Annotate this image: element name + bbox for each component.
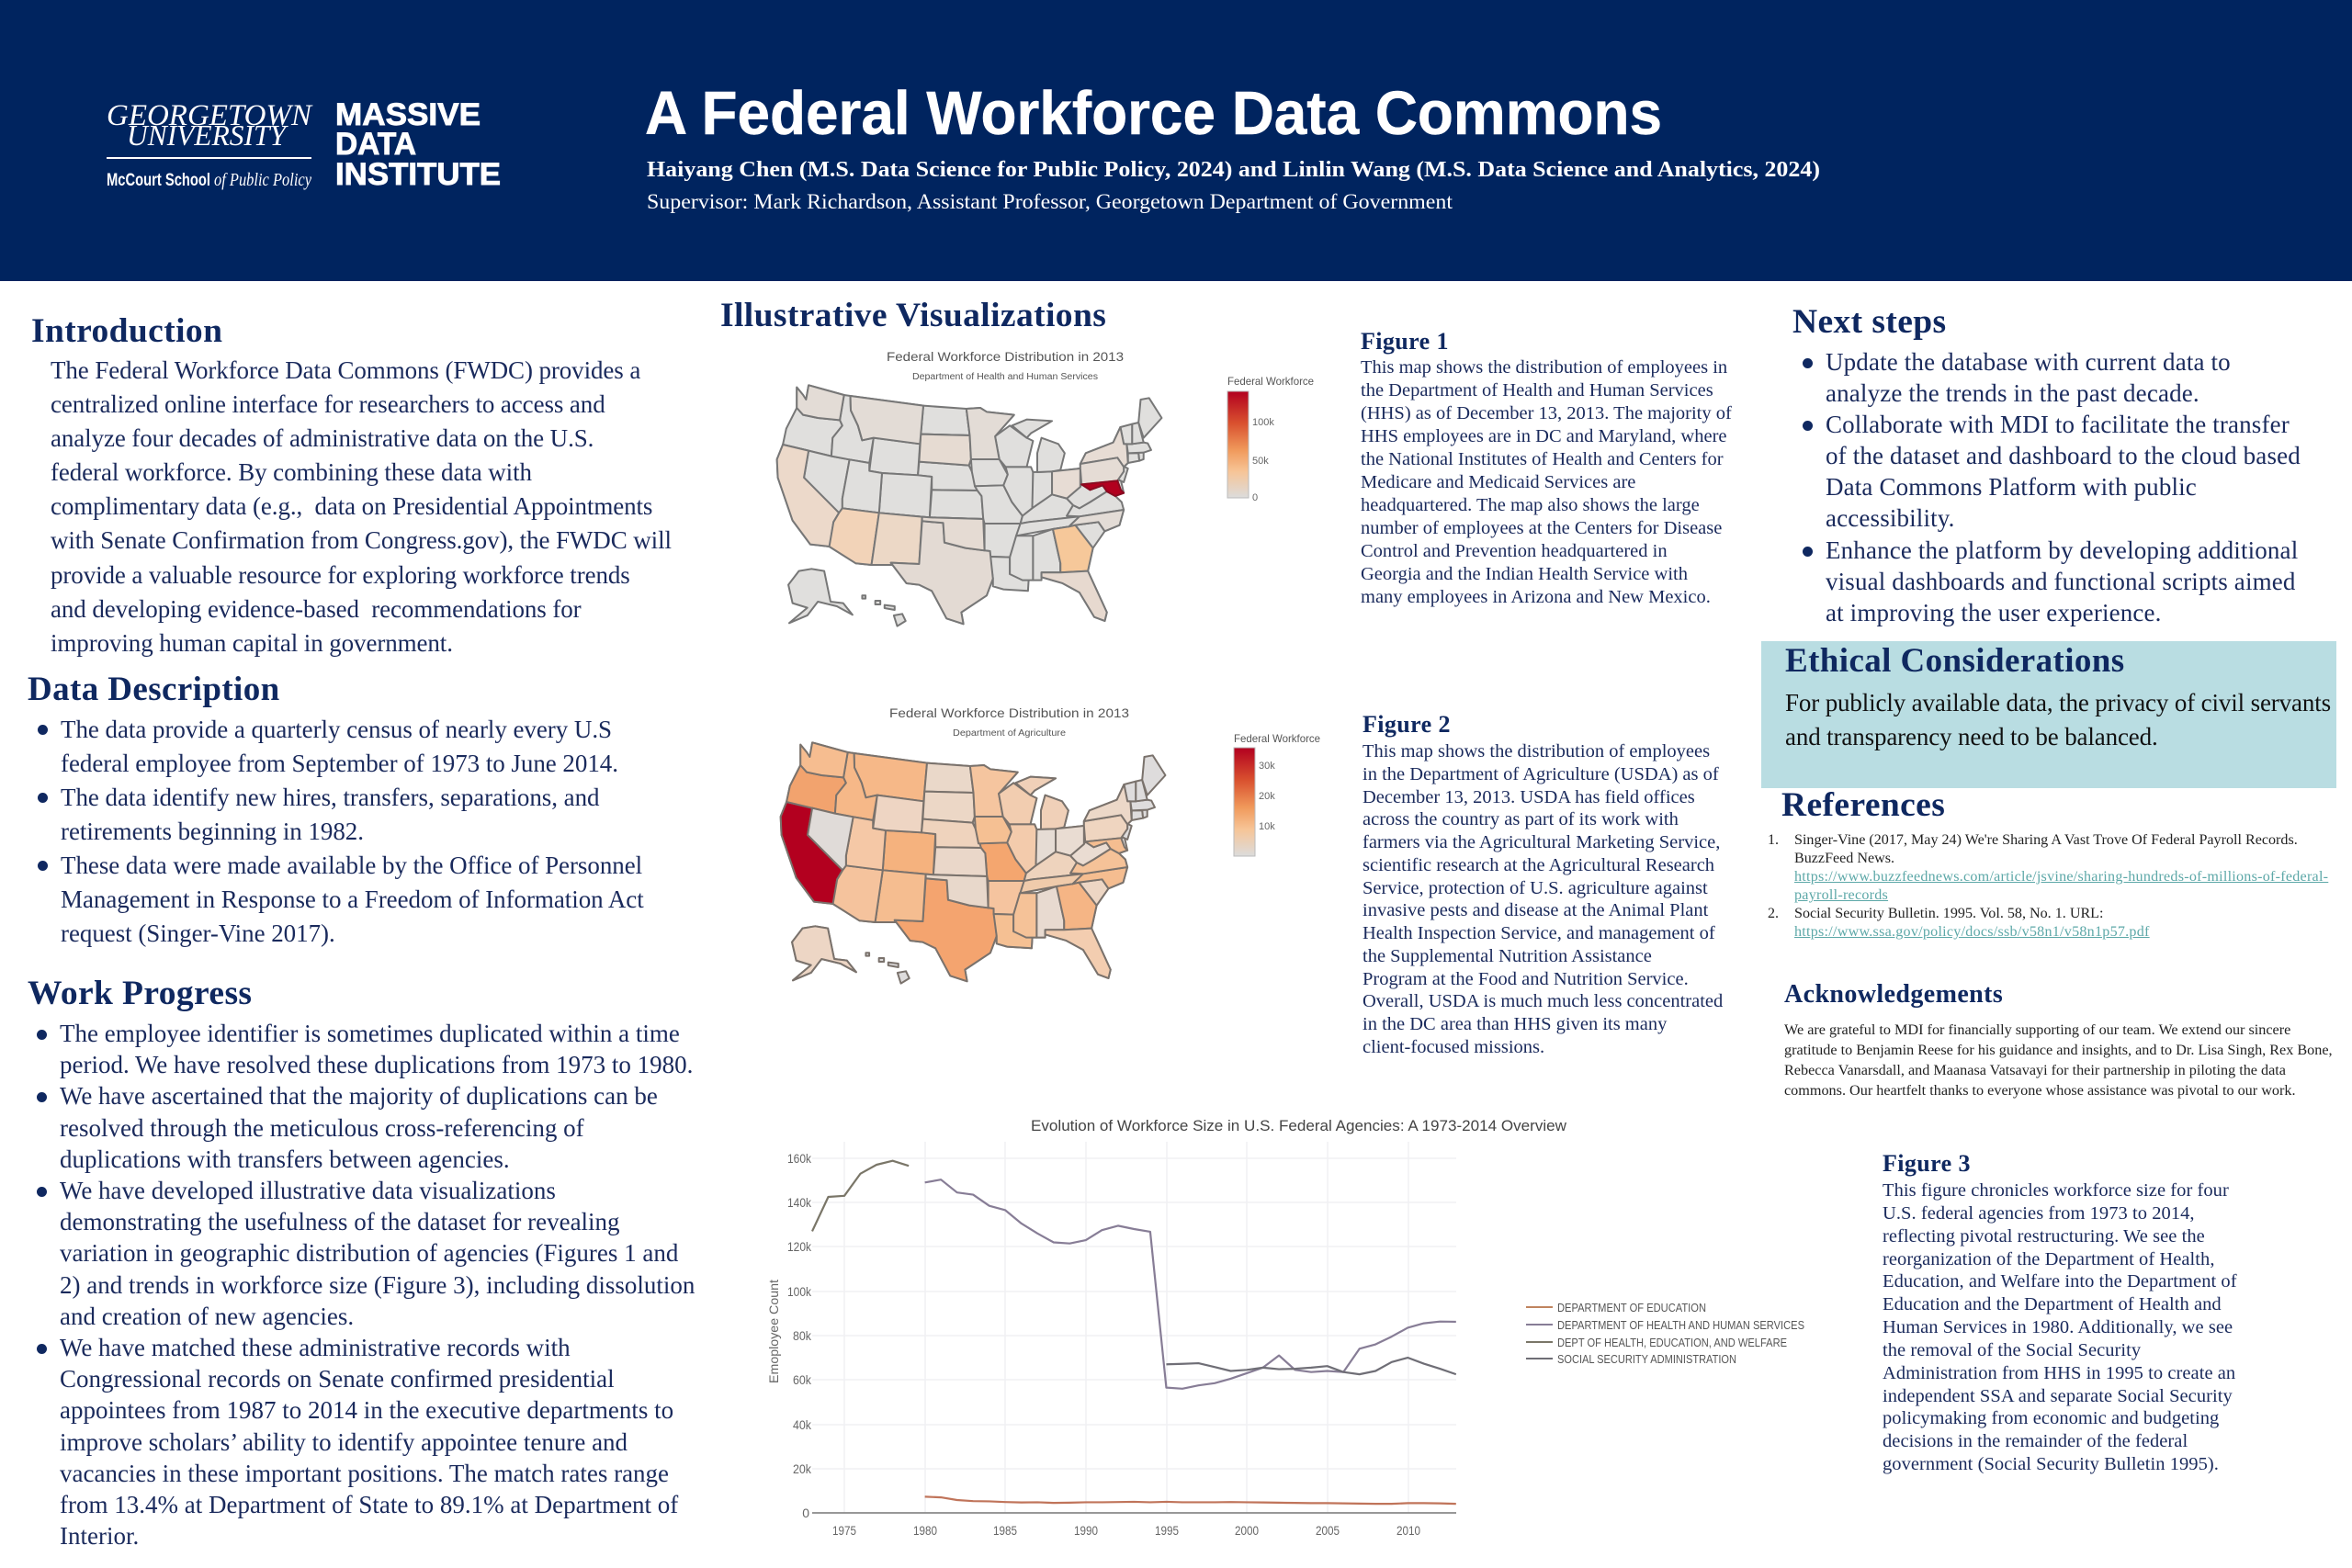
list: next steps: Enhance the platform by developing additional visual dashboards and functional scripts aimed at improving the user experience. [1826, 536, 2298, 626]
logo: Georgetown University McCourt School: UNIVERSITY [127, 118, 288, 152]
line chart: figure 3 workforce size [766, 1117, 1567, 1538]
y axis labels: 80k [793, 1328, 812, 1343]
list: references [1768, 832, 2328, 940]
colorbar legend fig 2: 10k [1259, 821, 1275, 832]
list: work progress [37, 1020, 695, 1550]
list: references: Social Security Bulletin. 1995. Vol. 58, No. 1. URL: https://www.ssa.gov/policy/docs/ssb/v58n1/v58n1p57.pdf [1794, 906, 2150, 940]
heading: references: References [1781, 786, 1945, 824]
colorbar legend fig 1: 100k [1252, 417, 1274, 428]
y axis title: Emoployee Count [766, 1280, 781, 1383]
list: data description: The data identify new hires, transfers, separations, and retirements beginning in 1982. [61, 784, 599, 845]
ethical considerations panel background [1761, 641, 2336, 788]
y axis labels: 60k [793, 1372, 812, 1387]
heading: data description: Data Description [28, 671, 280, 708]
text: figure 2 caption: This map shows the distribution of employees in the Department of Agriculture (USDA) as of December 13, 2013. USDA has field offices across the country as part of its work with farmers via the Agricultural Marketing Service, scientific research at the Agricultural Research Service, protection of U.S. agriculture against invasive pests and disease at the Animal Plant Health Inspection Service, and management of the Supplemental Nutrition Assistance Program at the Food and Nutrition Service. Overall, USDA is much much less concentrated in the DC area than HHS given its many client-focused missions. [1363, 741, 1723, 1057]
y axis labels: 40k [793, 1417, 812, 1432]
line chart legend [1526, 1301, 1804, 1366]
text: ethical considerations: For publicly available data, the privacy of civil servants and transparency need to be balanced. [1785, 689, 2331, 750]
y axis labels [787, 1151, 812, 1520]
y axis labels: 120k [787, 1239, 812, 1254]
x axis labels: 1975 [832, 1523, 856, 1538]
y axis labels: 140k [787, 1195, 812, 1210]
y axis labels: 20k [793, 1461, 812, 1476]
line chart legend: SOCIAL SECURITY ADMINISTRATION [1557, 1352, 1736, 1366]
logo: Georgetown University McCourt School [107, 99, 313, 190]
supervisor: Supervisor: Mark Richardson, Assistant Professor, Georgetown Department of Government [647, 190, 1453, 213]
list: next steps [1803, 348, 2301, 626]
text: figure 3 caption: This figure chronicles workforce size for four U.S. federal agencies from 1973 to 2014, reflecting pivotal restructuring. We see the reorganization of the Department of Health, Education, and Welfare into the Department of Education and the Department of Health and Human Services in 1980. Additionally, we see the removal of the Social Security Administration from HHS in 1995 to create an independent SSA and separate Social Security policymaking from economic and budgeting decisions in the remainder of the federal government (Social Security Bulletin 1995). [1883, 1180, 2237, 1474]
list: work progress: We have developed illustrative data visualizations demonstrating the usefulness of the dataset for revealing variation in geographic distribution of agencies (Figures 1 and 2) and trends in workforce size (Figure 3), including dissolution and creation of new agencies. [60, 1177, 695, 1330]
heading: figure 1: Figure 1 [1361, 328, 1449, 355]
text: figure 1 caption: This map shows the distribution of employees in the Department of Health and Human Services (HHS) as of December 13, 2013. The majority of HHS employees are in DC and Maryland, where the National Institutes of Health and Centers for Medicare and Medicaid Services are headquartered. The map also shows the large number of employees at the Centers for Disease Control and Prevention headquartered in Georgia and the Indian Health Service with many employees in Arizona and New Mexico. [1361, 357, 1732, 607]
line chart legend: DEPARTMENT OF EDUCATION [1557, 1301, 1706, 1314]
chart title: Evolution of Workforce Size in U.S. Federal Agencies: A 1973-2014 Overview [1031, 1117, 1567, 1134]
colorbar legend fig 1: 0 [1252, 492, 1258, 503]
map title fig 2: Federal Workforce Distribution in 2013 [889, 705, 1129, 720]
text: acknowledgements: We are grateful to MDI for financially supporting of our team. We extend our sincere gratitude to Benjamin Reese for his guidance and insights, and to Dr. Lisa Singh, Rex Bone, Rebecca Vanarsdall, and Maanasa Vatsavayi for their partnership in piloting the data commons. Our heartfelt thanks to everyone whose assistance was pivotal to our work. [1784, 1021, 2333, 1099]
list: work progress: The employee identifier is sometimes duplicated within a time period. We have resolved these duplications from 1973 to 1980. [60, 1020, 693, 1078]
x axis labels: 1995 [1155, 1523, 1179, 1538]
heading: next steps: Next steps [1792, 303, 1947, 341]
x axis labels: 1990 [1074, 1523, 1098, 1538]
heading: work progress: Work Progress [28, 975, 252, 1012]
heading: figure 2: Figure 2 [1363, 711, 1451, 738]
x axis labels: 2000 [1235, 1523, 1259, 1538]
x axis labels [832, 1523, 1420, 1538]
list: next steps: Update the database with current data to analyze the trends in the past decade. [1826, 348, 2231, 407]
colorbar legend fig 1: 50k [1252, 456, 1269, 467]
colorbar legend fig 2 [1234, 732, 1320, 856]
list: next steps: Collaborate with MDI to facilitate the transfer of the dataset and dashboard to the cloud based Data Commons Platform with public accessibility. [1826, 411, 2301, 532]
logo: Massive Data Institute: INSTITUTE [335, 157, 501, 192]
list: data description: The data provide a quarterly census of nearly every U.S federal employee from September of 1973 to June 2014. [61, 716, 618, 777]
map: figure 2 USDA distribution [781, 742, 1165, 984]
map title fig 1: Department of Health and Human Services [912, 372, 1098, 382]
text: introduction: The Federal Workforce Data Commons (FWDC) provides a centralized online interface for researchers to access and analyze four decades of administrative data on the U.S. federal workforce. By combining these data with complimentary data (e.g., data on Presidential Appointments with Senate Confirmation from Congress.gov), the FWDC will provide a valuable resource for exploring workforce trends and developing evidence-based recommendations for improving human capital in government. [51, 356, 672, 657]
list: data description: These data were made available by the Office of Personnel Management in Response to a Freedom of Information Act request (Singer-Vine 2017). [61, 852, 644, 947]
heading: acknowledgements: Acknowledgements [1784, 980, 2003, 1009]
heading: illustrative visualizations: Illustrative Visualizations [720, 297, 1106, 334]
line chart legend: DEPARTMENT OF HEALTH AND HUMAN SERVICES [1557, 1318, 1804, 1332]
colorbar legend fig 2: 30k [1259, 761, 1275, 772]
logo: Massive Data Institute [335, 97, 501, 192]
heading: figure 3: Figure 3 [1883, 1150, 1971, 1177]
map title fig 1: Federal Workforce Distribution in 2013 [887, 349, 1124, 364]
y axis labels: 0 [802, 1506, 809, 1520]
title: A Federal Workforce Data Commons [645, 79, 1662, 148]
x axis labels: 1980 [913, 1523, 937, 1538]
y axis labels: 160k [787, 1151, 812, 1166]
list: work progress: We have ascertained that the majority of duplications can be resolved through the meticulous cross-referencing of duplications with transfers between agencies. [60, 1082, 658, 1173]
x axis labels: 1985 [993, 1523, 1017, 1538]
text: 2. [1768, 906, 1779, 921]
map title fig 2: Department of Agriculture [953, 728, 1066, 739]
colorbar legend fig 2: Federal Workforce [1234, 732, 1320, 745]
colorbar legend fig 2: 20k [1259, 791, 1275, 802]
logo: Georgetown University McCourt School: McCourt School [107, 171, 210, 190]
text: 1. [1768, 832, 1779, 848]
colorbar legend fig 1 [1227, 375, 1314, 503]
colorbar legend fig 1: Federal Workforce [1227, 375, 1314, 388]
line chart legend: DEPT OF HEALTH, EDUCATION, AND WELFARE [1557, 1336, 1787, 1349]
heading: introduction: Introduction [31, 312, 222, 350]
authors: Haiyang Chen (M.S. Data Science for Public Policy, 2024) and Linlin Wang (M.S. Data Science and Analytics, 2024) [647, 158, 1820, 182]
x axis labels: 2010 [1396, 1523, 1420, 1538]
list: work progress: We have matched these administrative records with Congressional records on Senate confirmed presidential appointees from 1987 to 2014 in the executive departments to improve scholars’ ability to identify appointee tenure and vacancies in these important positions. The match rates range from 13.4% at Department of State to 89.1% at Department of Interior. [60, 1334, 678, 1550]
header band [0, 0, 2352, 281]
map title fig 2 [889, 705, 1129, 739]
y axis labels: 100k [787, 1284, 812, 1299]
map: figure 1 HHS distribution [777, 385, 1161, 626]
x axis labels: 2005 [1316, 1523, 1340, 1538]
logo: Massive Data Institute: MASSIVE [335, 97, 481, 132]
logo: Massive Data Institute: DATA [335, 127, 416, 162]
list: references: Singer-Vine (2017, May 24) We're Sharing A Vast Trove Of Federal Payroll Records. BuzzFeed News. https://www.buzzfeednews.com/article/jsvine/sharing-hundreds-of-millions-of-federal- payroll-records [1794, 832, 2328, 903]
logo: Georgetown University McCourt School: of Public Policy [214, 170, 311, 190]
logo: Georgetown University McCourt School: GEORGETOWN [107, 99, 313, 132]
heading: ethical considerations: Ethical Considerations [1785, 642, 2125, 680]
list: data description [38, 716, 644, 947]
map title fig 1 [887, 349, 1124, 382]
